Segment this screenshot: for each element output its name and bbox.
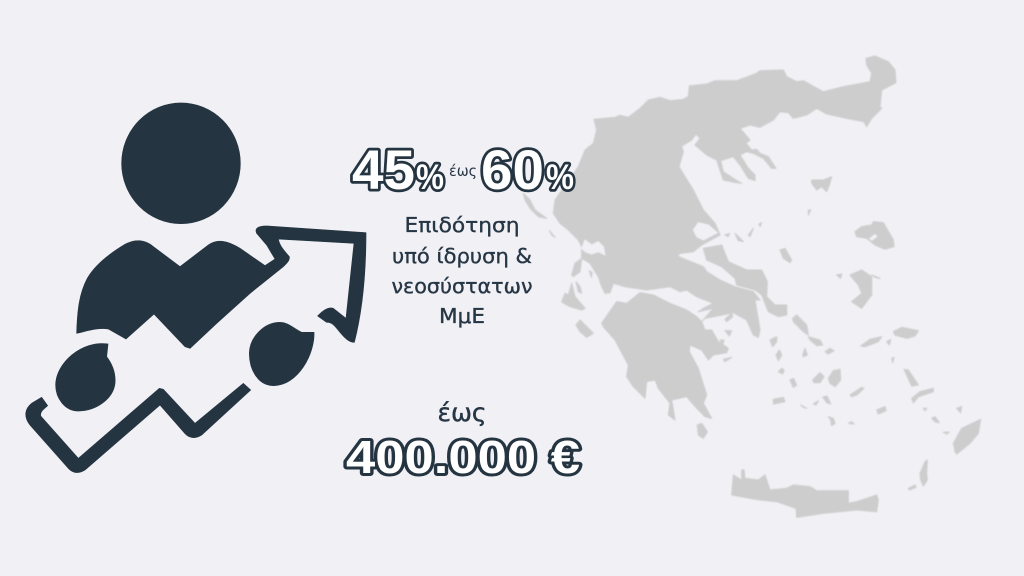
Lesbos	[855, 222, 894, 249]
icon: head	[122, 103, 240, 224]
amount label: έως	[437, 398, 487, 427]
description text: ΜμΕ	[439, 304, 485, 328]
figure: 60%: %	[546, 158, 574, 197]
description text	[392, 213, 532, 328]
description text: υπό ίδρυση &	[392, 244, 532, 268]
Crete	[732, 470, 878, 517]
icon: person with rising arrow	[26, 103, 366, 473]
amount figure: 400.000 €	[346, 431, 580, 483]
icon: rising line	[26, 383, 251, 473]
figure: 60%: 60	[481, 138, 544, 201]
figure: 60%	[481, 138, 574, 201]
Aegean islands	[697, 313, 981, 490]
Chios	[850, 270, 872, 308]
Ambracian gulf	[582, 240, 605, 255]
Ionian islands	[523, 193, 593, 337]
Pagasetic gulf	[693, 223, 717, 240]
Peloponnese	[602, 293, 728, 420]
icon: right hand	[249, 322, 314, 386]
figure: 45%: %	[416, 158, 444, 197]
small northern and Sporades islands	[725, 210, 880, 278]
figure: 45%	[352, 138, 444, 201]
Evia	[703, 245, 787, 317]
map of Greece	[523, 56, 981, 517]
mainland Greece	[553, 56, 896, 337]
Limnos	[812, 177, 832, 192]
description text: Επιδότηση	[404, 213, 520, 237]
icon: torso and arrowhead	[77, 226, 366, 348]
figure: 45%: 45	[352, 138, 415, 201]
description text: νεοσύστατων	[392, 274, 532, 298]
connector word: έως	[449, 162, 477, 180]
icon: left hand	[56, 344, 115, 411]
